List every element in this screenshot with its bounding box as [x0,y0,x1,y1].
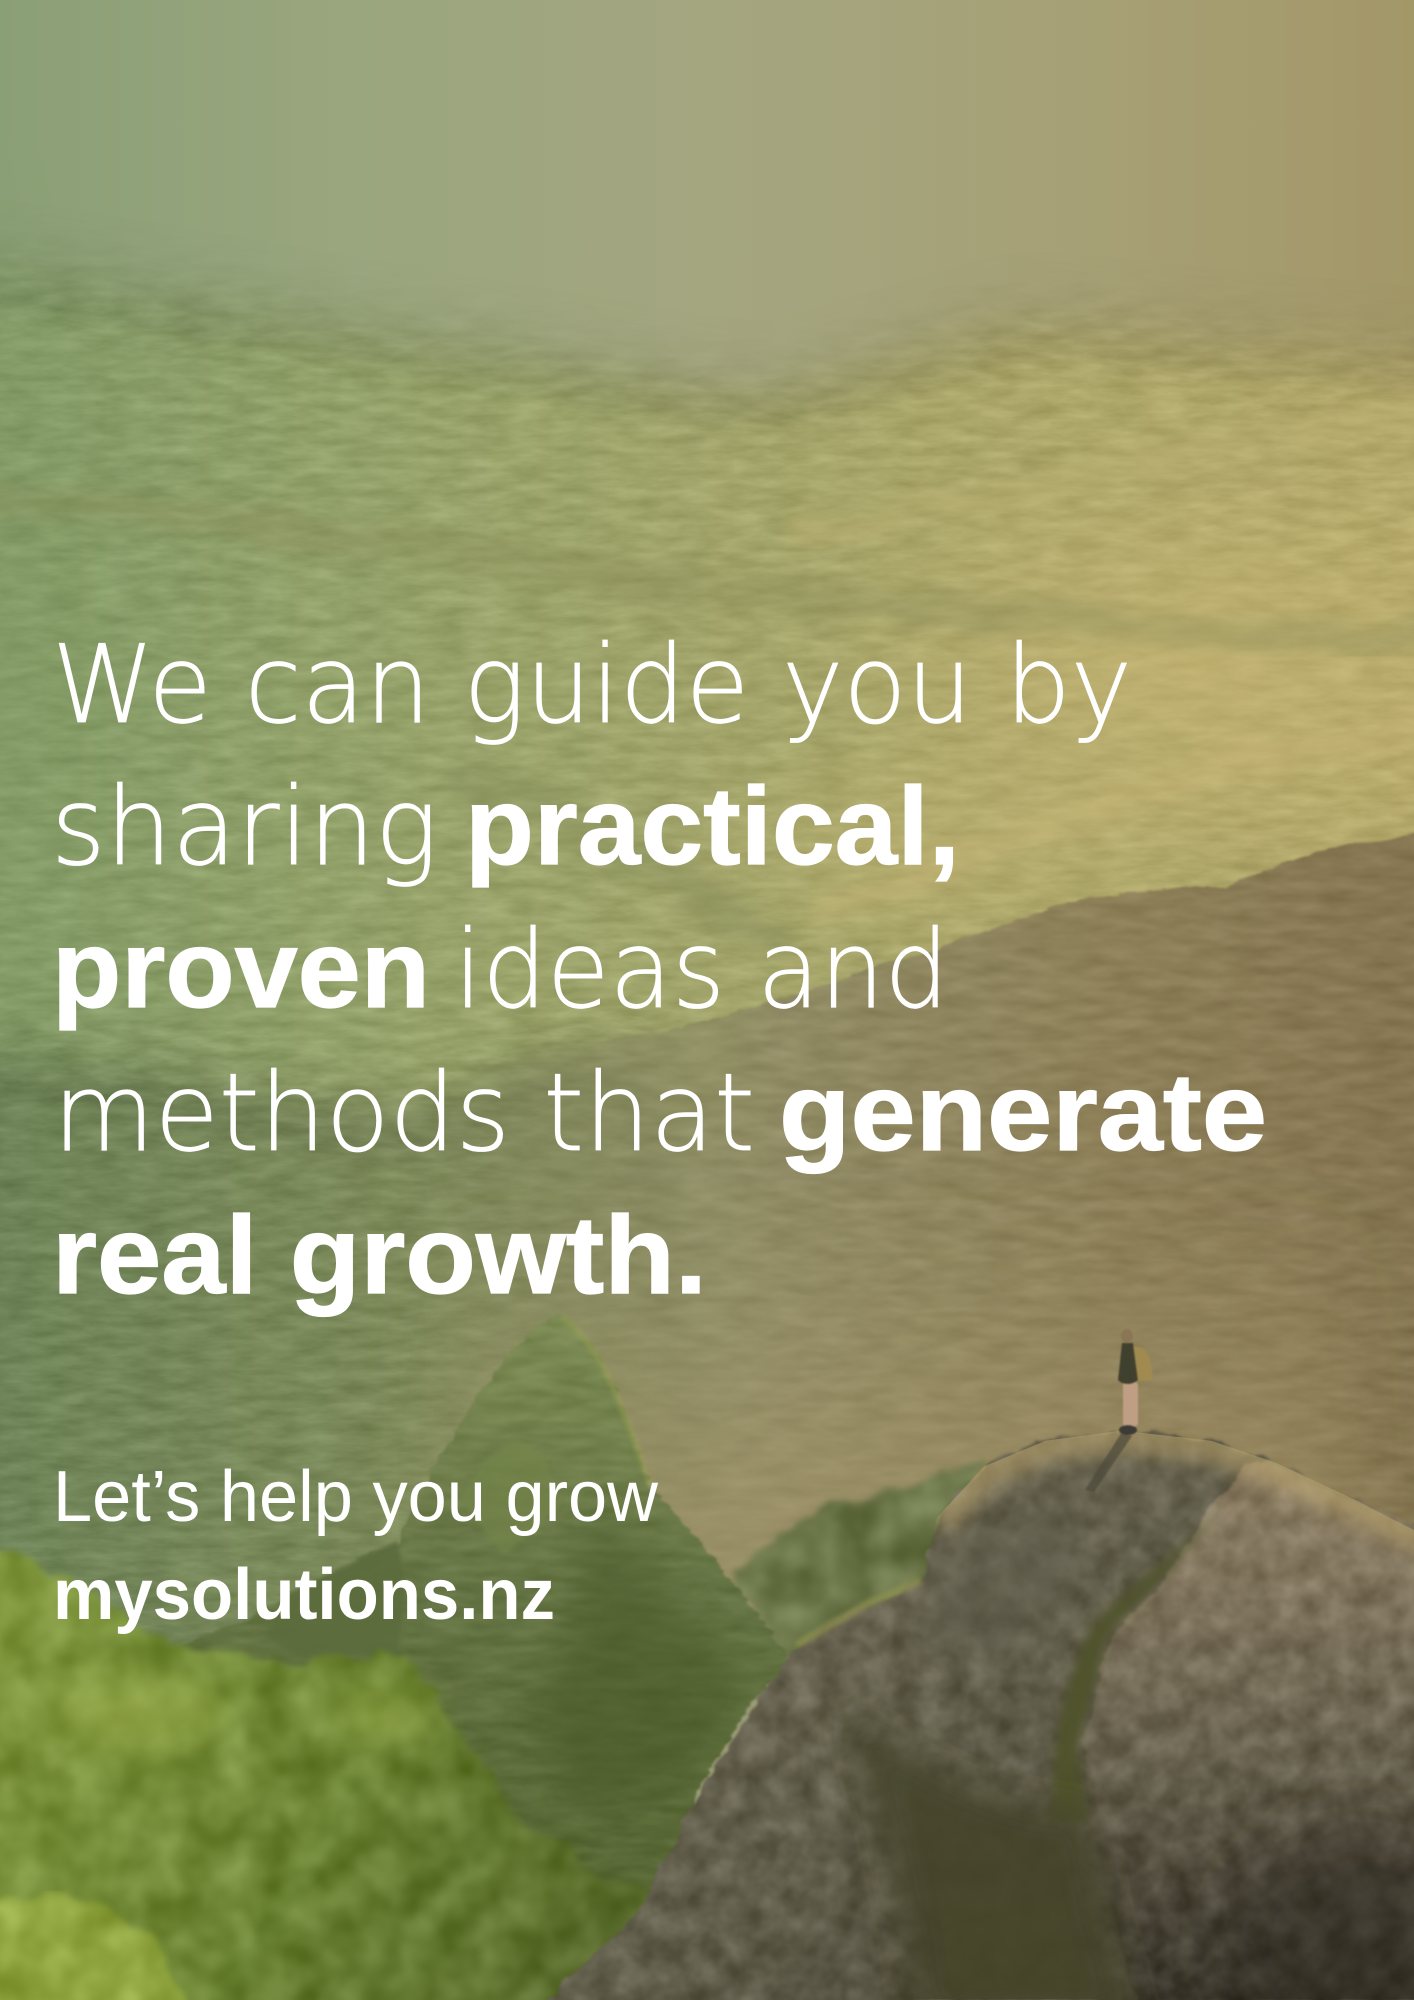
shadow of the hiker [1085,1432,1132,1492]
headline text: proven [52,908,430,1031]
valley haze [446,1211,1339,1594]
inner peak highlight [459,1438,561,1556]
right rock face [1084,1460,1414,2000]
pointed mountain [76,1315,793,1999]
headline text: practical, [465,765,960,888]
soft left ridge [0,1033,765,1683]
call to action text: mysolutions.nz [53,1555,555,1635]
call to action text [53,1457,659,1635]
hiker backpack [1133,1347,1152,1381]
headline text: methods that [53,1051,755,1176]
call to action text: Let’s help you grow [53,1457,659,1537]
hiker legs [1123,1382,1138,1426]
distant green slope [733,1464,988,1664]
dark lower valley [842,1708,1139,2000]
left rock lit ridge [797,1581,921,1645]
hiker torso [1118,1343,1138,1384]
sunlit peak edge [561,1317,650,1485]
headline text [51,623,1267,1317]
meadow foreground bump [0,1897,204,2000]
dark gully [536,1498,746,1810]
hiker feet [1119,1425,1137,1435]
hiker head [1121,1329,1133,1343]
meadow sunlit patches [51,1679,440,1751]
boulder summit [548,1431,1414,2000]
headline text: sharing [51,765,438,890]
hiker standing on summit [1118,1329,1152,1435]
headline text: real growth. [52,1194,707,1317]
headline text: We can guide you by [52,623,1132,748]
green meadow [0,1536,676,2000]
dark bottom corner [1224,1823,1414,2000]
shaded rock flank [948,1534,1064,1604]
headline text: ideas and [454,908,949,1033]
dark cliff shadow [268,1540,405,1660]
moss crack [1050,1509,1222,1824]
headline text: generate [779,1051,1267,1174]
summit sunlit glow [937,1433,1414,1536]
dark forested ridge [547,832,1414,1559]
